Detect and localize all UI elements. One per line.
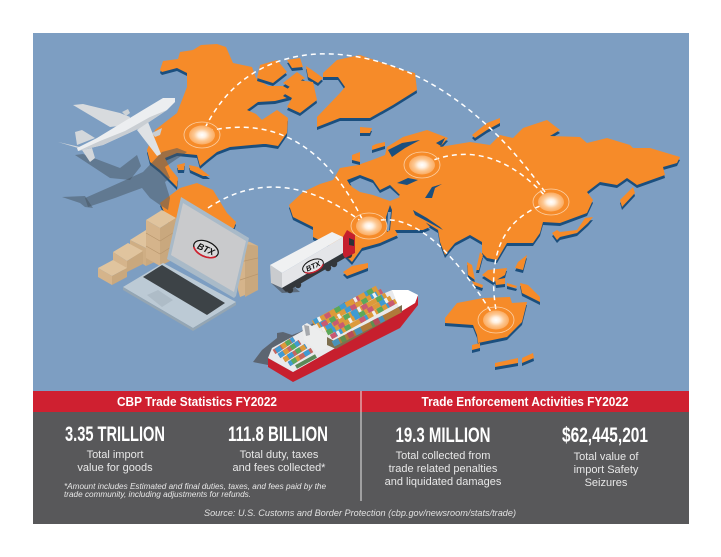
hub: Australia [478, 307, 514, 333]
New Zealand [495, 353, 534, 367]
stat: import value: 3.35 TRILLION [65, 423, 165, 446]
BTX logo on trailer: BTX [304, 259, 323, 273]
fuselage [77, 98, 175, 151]
route: North America to Africa [208, 127, 365, 225]
laptop screen [171, 203, 246, 292]
stat: safety seizures [562, 424, 648, 489]
stat: duty and fees [228, 423, 328, 474]
plane shadow [62, 148, 187, 210]
footnote: *Amount includes Estimated and final duties, taxes, and fees paid by the [64, 482, 327, 491]
Caribbean islands [177, 163, 210, 176]
ship shadow [253, 302, 350, 365]
aft containers [274, 339, 312, 364]
Madagascar [343, 263, 368, 276]
BTX logo: BTX [196, 241, 217, 258]
Southeast Asia islands [467, 252, 540, 302]
stat: penalties: 19.3 MILLION [396, 424, 490, 447]
chassis and wheels [282, 252, 352, 293]
hub: North America [184, 122, 220, 148]
cardboard boxes left stack [98, 210, 176, 285]
header bar: CBP Trade Statistics [33, 391, 361, 412]
hub: Asia [533, 189, 569, 215]
continent: Africa and Eurasia [289, 120, 680, 262]
Iceland [360, 127, 372, 133]
hull [268, 295, 418, 382]
stat: safety seizures: $62,445,201 [562, 424, 648, 447]
stat: safety seizures: Seizures [585, 477, 628, 489]
route: Africa to Australia [372, 220, 493, 315]
stat: duty and fees: 111.8 BILLION [228, 423, 328, 446]
left wing [73, 104, 130, 127]
header bar: CBP Trade Statistics: CBP Trade Statistics FY2022 [117, 395, 277, 409]
header bar: Trade Enforcement Activities [361, 391, 689, 412]
continent: North America [147, 44, 295, 187]
statistics panel background [33, 412, 689, 524]
bridge superstructure [302, 323, 327, 352]
stat: duty and fees: and fees collected* [233, 462, 326, 474]
British Isles [352, 142, 385, 162]
world map [147, 44, 680, 367]
route: Europe to Asia [426, 154, 547, 198]
trackpad [147, 290, 173, 307]
Japan and Sakhalin [552, 187, 635, 240]
keyboard [143, 265, 225, 315]
panel divider [360, 391, 362, 501]
stat: penalties: trade related penalties [389, 463, 498, 475]
laptop [123, 197, 249, 331]
hub: Europe [404, 152, 440, 178]
container ship [253, 288, 418, 382]
cardboard boxes right stack [238, 240, 258, 297]
Novaya Zemlya [472, 118, 500, 138]
truck [270, 230, 355, 293]
route: North America to Asia [205, 54, 545, 192]
stat: import value: value for goods [77, 462, 153, 474]
truck shadow [271, 283, 300, 293]
flight routes [205, 54, 548, 316]
forward containers side [327, 305, 402, 349]
stat: penalties: Total collected from [396, 450, 490, 462]
header bar: Trade Enforcement Activities: Trade Enforcement Activities FY2022 [422, 395, 629, 409]
stat: import value: Total import [87, 449, 143, 461]
stat: penalties: and liquidated damages [385, 476, 502, 488]
stat: penalties [385, 424, 502, 488]
Arctic islands [257, 58, 323, 113]
laptop base [123, 263, 236, 328]
stat: safety seizures: import Safety [574, 464, 639, 476]
continent: Australia [445, 297, 527, 350]
airplane [58, 98, 175, 162]
laptop lid [167, 197, 249, 298]
source line: Source: U.S. Customs and Border Protection (cbp.gov/newsroom/stats/trade) [204, 508, 516, 519]
bow [392, 290, 418, 311]
tail [58, 130, 95, 162]
right wing [137, 122, 161, 156]
Greenland [317, 55, 417, 127]
footnote: trade community, including adjustments for refunds. [64, 490, 251, 499]
continent: South America [160, 183, 236, 240]
stat: duty and fees: Total duty, taxes [240, 449, 319, 461]
seas [347, 138, 445, 232]
route: South America to Africa [208, 187, 362, 222]
stat: safety seizures: Total value of [574, 451, 639, 463]
stat: import value [65, 423, 165, 474]
hub: Africa [351, 213, 387, 239]
trailer [270, 232, 343, 273]
deck [268, 290, 418, 372]
footnote [64, 482, 327, 499]
forward containers [313, 288, 396, 337]
map background panel [33, 33, 689, 391]
cab [343, 230, 355, 258]
route: Asia to Australia [494, 203, 548, 316]
